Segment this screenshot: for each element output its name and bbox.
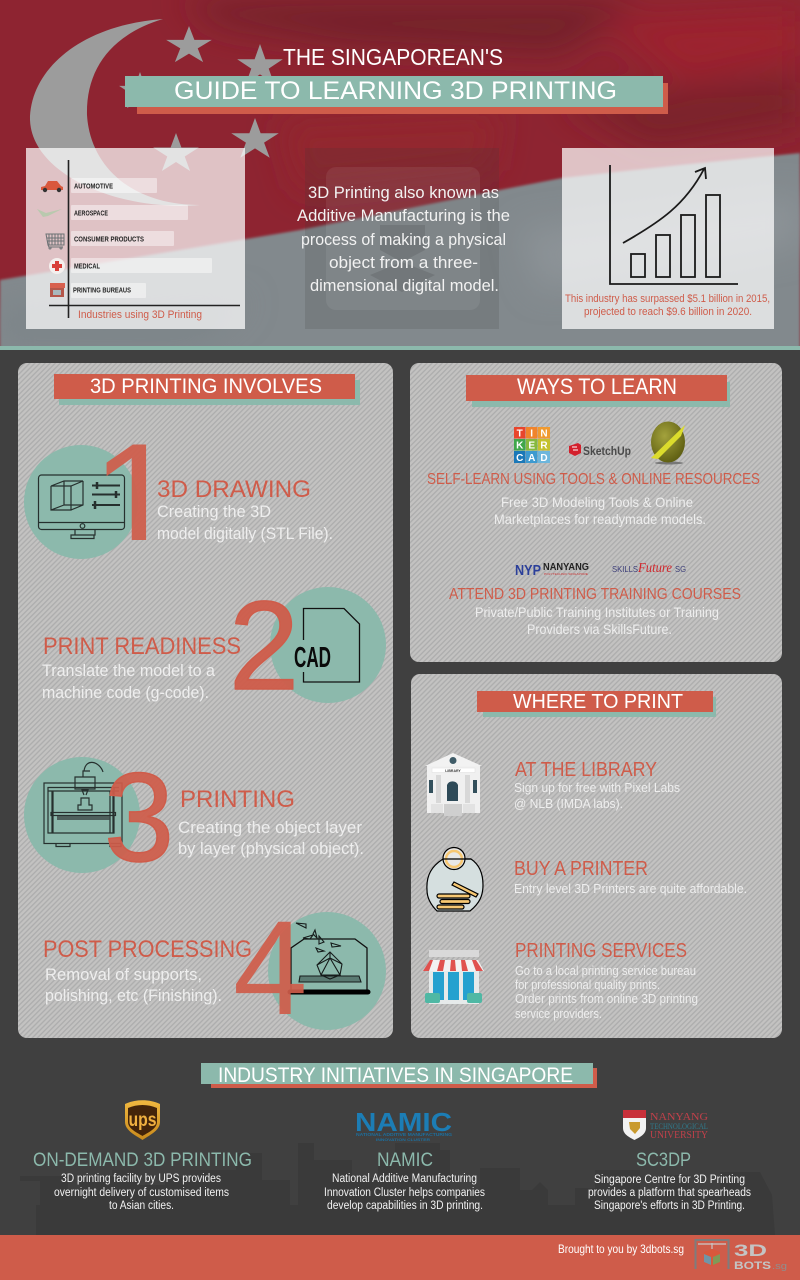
step 1: [24, 444, 332, 559]
step 1: Creating the 3D: [157, 502, 271, 521]
text: SC3DP description: provides a platform that spearheads: [588, 1187, 751, 1199]
logo: Tinkercad: I: [530, 428, 533, 440]
section: industry initiatives: [33, 1063, 751, 1212]
panel: where to print: BUY A PRINTER: [514, 858, 648, 880]
industry labels: AUTOMOTIVE: [74, 184, 113, 190]
step 4: Removal of supports,: [45, 965, 202, 984]
flag crescent: [30, 19, 200, 206]
skyline silhouette: [20, 1143, 775, 1235]
logo: Tinkercad: R: [540, 440, 548, 452]
panel: ways to learn: Free 3D Modeling Tools & Online: [501, 494, 693, 510]
definition text: [297, 183, 510, 295]
icon: medical cross: [49, 258, 65, 274]
logo: 3D Bots: .sg: [772, 1261, 787, 1271]
step 3: 3: [104, 747, 174, 888]
logo: Tinkercad: [514, 427, 550, 464]
step 3: PRINTING: [180, 786, 295, 813]
definition text: 3D Printing also known as: [308, 183, 499, 202]
chart axes and bars: [610, 165, 738, 284]
growth arrow: [623, 168, 706, 243]
heading: [477, 691, 716, 717]
logo: NTU: [623, 1110, 708, 1141]
icon: store: [50, 283, 65, 297]
section: industry initiatives: NAMIC: [377, 1150, 433, 1171]
logo: SkillsFuture SG: SG: [675, 564, 686, 574]
logo: 3D Bots: BOTS: [734, 1260, 771, 1272]
step 2: Translate the model to a: [42, 661, 216, 680]
text: NAMIC description: [324, 1173, 485, 1212]
panel: growth chart: [562, 148, 774, 329]
panel: ways to learn: [410, 363, 782, 662]
heading: 3D PRINTING INVOLVES: [90, 375, 322, 398]
definition text: dimensional digital model.: [310, 276, 499, 295]
panel: where to print: PRINTING SERVICES: [515, 940, 687, 962]
panel: ways to learn: Marketplaces for readymade models.: [494, 511, 706, 527]
text: NAMIC description: develop capabilities in 3D printing.: [327, 1200, 483, 1212]
text: SC3DP description: [588, 1174, 751, 1212]
logo: NTU: NANYANG: [650, 1112, 708, 1123]
panel: where to print: Entry level 3D Printers are quite affordable.: [514, 881, 747, 896]
step 4: POST PROCESSING: [43, 936, 252, 963]
logo: Nanyang Polytechnic: NYP: [515, 562, 541, 579]
logo: SketchUp: SketchUp: [583, 444, 631, 458]
logo: 3D Bots: [696, 1240, 787, 1272]
definition text: process of making a physical: [301, 230, 506, 249]
step 2: PRINT READINESS: [43, 633, 241, 660]
panel: where to print: Go to a local printing service bureau: [515, 964, 696, 978]
step 2: [42, 575, 386, 716]
icon: coin jar: [427, 848, 483, 911]
text: UPS description: 3D printing facility by UPS provides: [61, 1173, 221, 1185]
step 1: model digitally (STL File).: [157, 524, 333, 543]
logo: SkillsFuture SG: [612, 561, 686, 576]
industry labels: PRINTING BUREAUS: [73, 288, 131, 294]
panel: ways to learn: SELF-LEARN USING TOOLS & ONLINE RESOURCES: [427, 471, 760, 488]
heading: [54, 374, 360, 405]
heading: [466, 374, 730, 407]
text: SC3DP description: Singapore Centre for 3D Printing: [594, 1174, 745, 1186]
panel: growth chart: projected to reach $9.6 billion in 2020.: [584, 306, 752, 318]
definition text: object from a three-: [329, 253, 478, 272]
title: THE SINGAPOREAN'S: [283, 44, 503, 70]
logo: Tinkercad: E: [528, 440, 535, 452]
panel: where to print: Sign up for free with Pixel Labs: [514, 780, 680, 795]
logo: NTU: TECHNOLOGICAL: [650, 1122, 708, 1131]
definition text: Additive Manufacturing is the: [297, 206, 510, 225]
footer: [0, 1235, 800, 1280]
logo: SkillsFuture SG: SKILLS: [612, 564, 638, 574]
panel: ways to learn: ATTEND 3D PRINTING TRAINING COURSES: [449, 586, 741, 603]
section: industry initiatives: ON-DEMAND 3D PRINTING: [33, 1150, 252, 1171]
heading: INDUSTRY INITIATIVES IN SINGAPORE: [218, 1064, 573, 1087]
icon: finishing object: [290, 923, 368, 992]
step 2: 2: [229, 575, 299, 716]
icon: printing store: [423, 950, 484, 1004]
panel: where to print: [411, 674, 782, 1038]
step 4: [43, 894, 386, 1043]
heading: WAYS TO LEARN: [517, 374, 677, 399]
heading: WHERE TO PRINT: [513, 691, 683, 713]
panel: industries chart: Industries using 3D Printing: [78, 309, 202, 321]
text: UPS description: overnight delivery of customised items: [54, 1187, 229, 1199]
step 3: Creating the object layer: [178, 818, 362, 837]
industry labels: AEROSPACE: [74, 210, 108, 218]
step 4: polishing, etc (Finishing).: [45, 986, 222, 1005]
icon: CAD file: CAD: [294, 642, 331, 674]
industry labels: [73, 184, 144, 294]
panel: where to print: Order prints from online 3D printing: [515, 992, 698, 1006]
industry bars: [71, 178, 212, 298]
text: NAMIC description: National Additive Manufacturing: [332, 1173, 477, 1185]
title: [125, 44, 668, 114]
industry labels: CONSUMER PRODUCTS: [74, 236, 144, 244]
logo: Tinkercad: T: [517, 428, 523, 440]
flag stars: [119, 26, 283, 171]
logo: SketchUp: [569, 443, 631, 458]
logo: NAMIC: NAMIC: [355, 1107, 452, 1137]
panel: ways to learn: Private/Public Training Institutes or Training: [475, 604, 719, 620]
logo: Tinkercad: K: [516, 440, 524, 452]
logo: Nanyang Polytechnic: POLYTECHNIC SINGAPORE: [544, 572, 588, 576]
logo: NTU: UNIVERSITY: [650, 1130, 708, 1141]
logo: SkillsFuture SG: Future: [637, 561, 672, 576]
text: SC3DP description: Singapore's efforts in 3D Printing.: [594, 1200, 745, 1212]
logo: NAMIC: NATIONAL ADDITIVE MANUFACTURING: [356, 1132, 453, 1137]
panel: where to print: AT THE LIBRARY: [515, 759, 657, 781]
logo: Nanyang Polytechnic: NANYANG: [543, 561, 589, 573]
icon: car: [41, 181, 63, 192]
step 1: 3D DRAWING: [157, 476, 311, 503]
step 2: machine code (g-code).: [42, 683, 209, 702]
icon: CAD file: [294, 608, 360, 682]
section: industry initiatives: SC3DP: [636, 1150, 691, 1171]
text: UPS description: to Asian cities.: [109, 1200, 174, 1212]
icon: library: [425, 753, 482, 816]
logo: 3D Bots: 3D: [734, 1241, 767, 1260]
panel: 3D printing involves: [18, 363, 393, 1043]
footer: Brought to you by 3dbots.sg: [558, 1242, 684, 1256]
logo: Tinkercad: N: [540, 428, 548, 440]
industry labels: MEDICAL: [74, 264, 101, 270]
icon: 3D printer: [44, 762, 122, 846]
header flag background: [0, 0, 800, 350]
step 3: by layer (physical object).: [178, 839, 364, 858]
panel: where to print: for professional quality prints.: [515, 978, 660, 992]
icon: plane: [37, 209, 62, 217]
icon: cart: [46, 234, 64, 249]
text: UPS description: [54, 1173, 229, 1212]
logo: NAMIC: INNOVATION CLUSTER: [376, 1137, 430, 1142]
logo: UPS: [125, 1100, 160, 1140]
logo: UPS: ups: [128, 1110, 156, 1131]
logo: Tinkercad: D: [540, 453, 548, 464]
icon: library: LIBRARY: [445, 769, 461, 773]
panel: where to print: service providers.: [515, 1007, 602, 1021]
logo: green sphere: [651, 422, 685, 464]
title: GUIDE TO LEARNING 3D PRINTING: [174, 77, 617, 105]
icon: monitor with cube: [38, 475, 124, 538]
logo: Tinkercad: C: [516, 453, 523, 464]
logo: Tinkercad: A: [528, 453, 535, 464]
panel: growth chart: This industry has surpassed $5.1 billion in 2015,: [565, 293, 770, 305]
icon: faded printer: [326, 167, 480, 310]
panel: where to print: @ NLB (IMDA labs).: [514, 796, 623, 811]
logo: Nanyang Polytechnic: [515, 561, 589, 579]
panel: ways to learn: Providers via SkillsFuture.: [527, 621, 672, 637]
panel: industries chart: [26, 148, 245, 329]
panel: definition: [297, 148, 510, 329]
step 3: [24, 747, 364, 888]
step 1: 1: [91, 410, 181, 591]
step 4: 4: [233, 894, 308, 1043]
text: NAMIC description: Innovation Cluster helps companies: [324, 1187, 485, 1199]
